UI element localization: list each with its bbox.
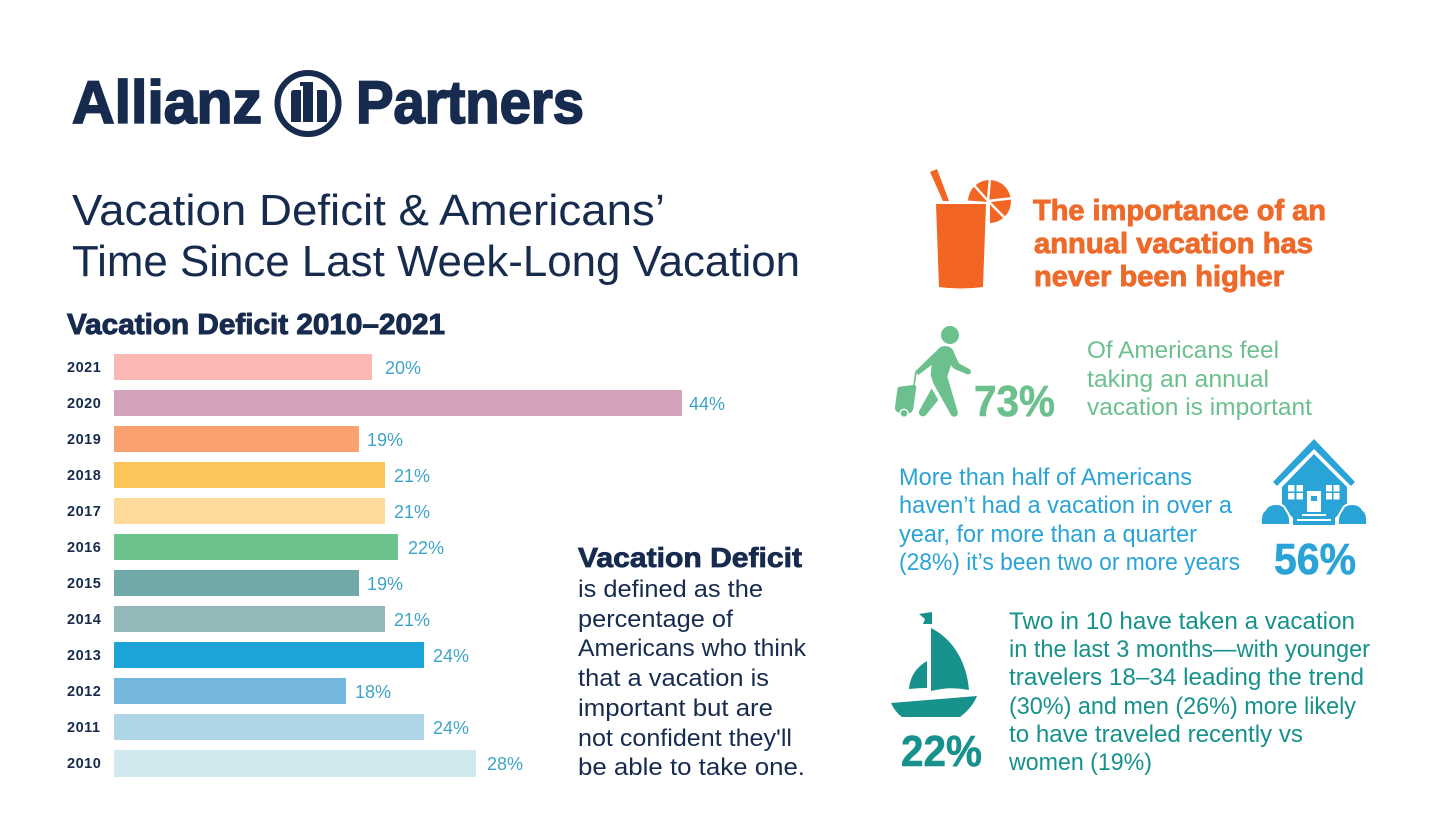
bar chart: vacation deficit by year: 19% [367, 430, 403, 450]
text block: vacation deficit definition: important but are [578, 695, 773, 722]
text block: importance of annual vacation: taking an annual [1087, 366, 1269, 393]
bar chart: vacation deficit by year: 21% [394, 610, 430, 630]
bar chart: vacation deficit by year: 24% [433, 718, 469, 738]
title: Time Since Last Week-Long Vacation [72, 237, 800, 286]
text block: vacation deficit definition: is defined as the [578, 576, 763, 603]
text block: vacation deficit definition: that a vacation is [578, 665, 769, 692]
bar chart: vacation deficit by year: 2014 [67, 612, 101, 628]
text block: two in 10: travelers 18–34 leading the trend [1009, 664, 1364, 691]
bar chart: vacation deficit by year: 21% [394, 502, 430, 522]
text block: more than half: year, for more than a quarter [899, 521, 1197, 548]
callout: importance of an annual vacation: annual vacation has [1034, 228, 1313, 260]
title: Vacation Deficit & Americans’ [72, 186, 665, 235]
bar chart: vacation deficit by year: 20% [385, 358, 421, 378]
bar chart: vacation deficit by year: 24% [433, 646, 469, 666]
callout: importance of an annual vacation [1033, 195, 1326, 293]
text block: more than half: More than half of Americans [899, 464, 1192, 491]
bar chart: vacation deficit by year: 2019 [67, 432, 101, 448]
logo: Allianz Partners: Allianz [72, 69, 262, 136]
text block: vacation deficit definition: be able to take one. [578, 754, 805, 781]
text block: importance of annual vacation: Of Americans feel [1087, 337, 1279, 364]
text block: two in 10: women (19%) [1008, 749, 1152, 776]
icon: orange drink [930, 169, 1014, 288]
bar chart: vacation deficit by year: 2017 [67, 504, 101, 520]
text block: vacation deficit definition: Americans who think [578, 635, 807, 662]
bar chart: vacation deficit by year: 2018 [67, 468, 101, 484]
text block: importance of annual vacation [1087, 337, 1312, 421]
text block: vacation deficit definition [578, 542, 807, 781]
logo: Allianz Partners [72, 69, 584, 136]
stat: 73%: 73% [974, 377, 1055, 426]
text block: two in 10: in the last 3 months—with younger [1009, 636, 1370, 663]
text block: more than half: (28%) it’s been two or more years [899, 549, 1240, 576]
text block: vacation deficit definition: not confident they'll [578, 725, 792, 752]
text block: two in 10: to have traveled recently vs [1009, 721, 1303, 748]
logo: Allianz Partners: Partners [356, 69, 584, 136]
bar chart: vacation deficit by year: 2015 [67, 576, 101, 592]
icon: traveler with suitcase [895, 326, 971, 417]
text block: more than half: haven’t had a vacation in over a [899, 492, 1233, 519]
text block: vacation deficit definition: percentage of [578, 606, 733, 633]
text block: two in 10 [1008, 608, 1370, 776]
bar chart: vacation deficit by year: 19% [367, 574, 403, 594]
bar chart: vacation deficit by year: 44% [689, 394, 725, 414]
text block: more than half [899, 464, 1240, 576]
heading: bar chart title: Vacation Deficit 2010–2021 [67, 309, 445, 341]
icon: sailboat [891, 612, 977, 717]
callout: importance of an annual vacation: never been higher [1034, 261, 1284, 293]
icon: house with bushes [1261, 439, 1367, 525]
bar chart: vacation deficit by year: 2010 [67, 756, 101, 772]
bar chart: vacation deficit by year: 22% [408, 538, 444, 558]
bar chart: vacation deficit by year: 2020 [67, 396, 101, 412]
bar chart: vacation deficit by year [67, 354, 725, 777]
bar chart: vacation deficit by year: 28% [487, 754, 523, 774]
text block: importance of annual vacation: vacation is important [1087, 394, 1312, 421]
bar chart: vacation deficit by year: 18% [355, 682, 391, 702]
callout: importance of an annual vacation: The importance of an [1033, 195, 1326, 227]
stat: 22%: 22% [901, 727, 982, 776]
title [72, 186, 800, 286]
bar chart: vacation deficit by year: 21% [394, 466, 430, 486]
stat: 56%: 56% [1274, 535, 1356, 584]
text block: vacation deficit definition: Vacation Deficit [578, 542, 802, 573]
bar chart: vacation deficit by year: 2013 [67, 648, 101, 664]
bar chart: vacation deficit by year: 2016 [67, 540, 101, 556]
bar chart: vacation deficit by year: 2012 [67, 684, 101, 700]
bar chart: vacation deficit by year: 2021 [67, 360, 101, 376]
text block: two in 10: Two in 10 have taken a vacation [1009, 608, 1355, 635]
text block: two in 10: (30%) and men (26%) more likely [1009, 693, 1356, 720]
bar chart: vacation deficit by year: 2011 [67, 720, 100, 736]
